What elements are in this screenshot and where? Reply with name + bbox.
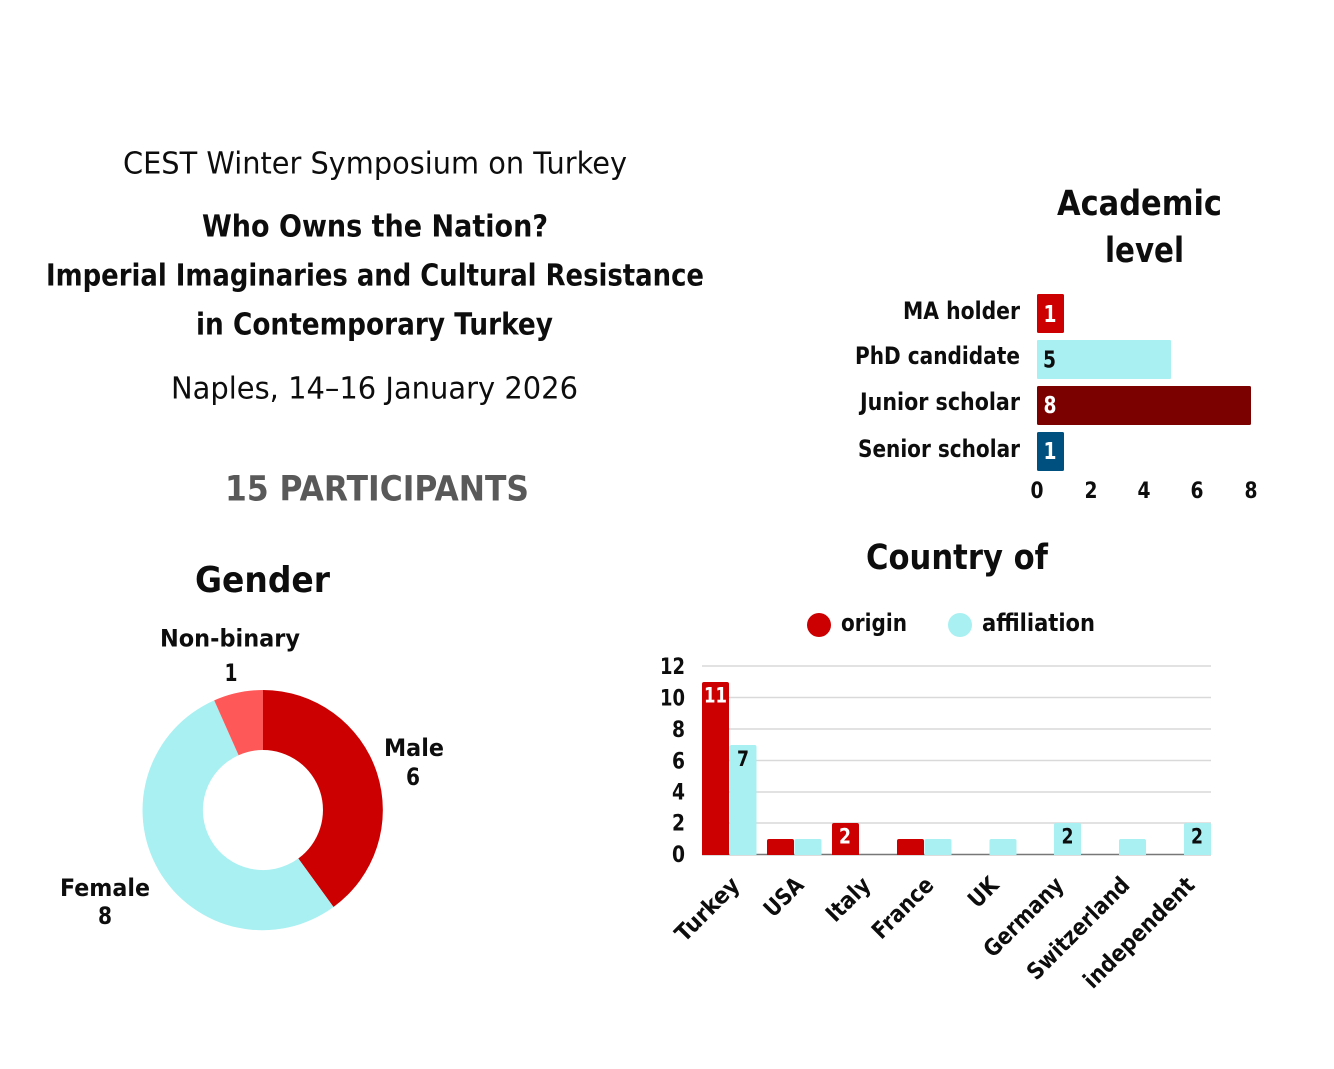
y axis labels: 12: [660, 655, 685, 680]
bar values: 8: [1044, 393, 1056, 419]
x axis country labels: [670, 872, 1200, 994]
x axis labels: 0: [1030, 479, 1044, 504]
symposium title: Imperial Imaginaries and Cultural Resistance: [46, 258, 704, 294]
title block: [46, 146, 704, 406]
donut chart: [143, 690, 383, 930]
panel: country: [660, 538, 1211, 994]
y axis labels: 8: [672, 718, 685, 743]
bar values: 1: [1044, 302, 1056, 328]
date and place: Naples, 14–16 January 2026: [171, 372, 578, 406]
column values: [704, 684, 1203, 848]
donut labels: 1: [224, 659, 238, 687]
x axis country labels: UK: [963, 872, 1005, 913]
column values: 2: [1191, 824, 1203, 848]
x axis country labels: Turkey: [670, 872, 745, 947]
donut labels: Non-binary: [160, 624, 300, 652]
category labels: PhD candidate: [855, 342, 1020, 370]
bar values: 5: [1043, 348, 1056, 374]
heading: gender: Gender: [195, 560, 330, 601]
column values: 11: [704, 684, 727, 708]
x axis country labels: USA: [759, 872, 809, 923]
bar values: 1: [1044, 439, 1056, 465]
column values: 2: [1062, 824, 1074, 848]
y axis labels: 0: [672, 843, 685, 868]
heading: country of: Country of: [866, 538, 1049, 578]
category labels: [855, 297, 1020, 463]
donut labels: Male: [384, 734, 444, 762]
panel: academic level: [855, 184, 1258, 504]
legend: origin: [841, 609, 907, 637]
bar values: [1043, 302, 1056, 465]
legend: affiliation: [982, 609, 1095, 637]
y axis labels: 2: [672, 812, 685, 836]
participants count: 15 PARTICIPANTS: [225, 470, 529, 510]
x axis labels: 2: [1084, 479, 1098, 504]
heading: academic level: Academic: [1057, 184, 1222, 224]
donut labels: [60, 624, 444, 930]
x axis country labels: independent: [1079, 872, 1200, 994]
y axis labels: 6: [672, 750, 685, 774]
donut labels: 6: [406, 763, 420, 791]
column values: 7: [737, 747, 749, 771]
panel: gender: [60, 560, 444, 930]
category labels: Senior scholar: [858, 435, 1020, 463]
legend: [807, 609, 1095, 637]
x axis country labels: France: [867, 872, 939, 944]
x axis country labels: Germany: [979, 872, 1069, 963]
symposium title: in Contemporary Turkey: [196, 308, 553, 342]
symposium title: [46, 210, 704, 342]
x axis labels: 4: [1138, 479, 1150, 504]
column bars: [702, 682, 1211, 855]
horizontal bars: [1037, 294, 1251, 471]
x axis labels: 6: [1190, 479, 1204, 504]
x axis labels: 8: [1244, 479, 1258, 504]
category labels: Junior scholar: [858, 388, 1020, 416]
x axis country labels: Italy: [821, 872, 876, 928]
heading: academic level: level: [1105, 231, 1184, 271]
category labels: MA holder: [903, 297, 1020, 325]
donut labels: Female: [60, 874, 150, 902]
donut labels: 8: [98, 902, 112, 930]
y axis labels: [660, 655, 685, 868]
column values: 2: [839, 824, 851, 848]
y axis labels: 4: [672, 780, 685, 806]
x axis country labels: Switzerland: [1022, 872, 1135, 985]
y axis labels: 10: [660, 686, 685, 712]
symposium title: Who Owns the Nation?: [202, 210, 548, 244]
event name: CEST Winter Symposium on Turkey: [123, 146, 627, 182]
x axis labels: [1030, 479, 1258, 504]
heading: academic level: [1057, 184, 1222, 271]
